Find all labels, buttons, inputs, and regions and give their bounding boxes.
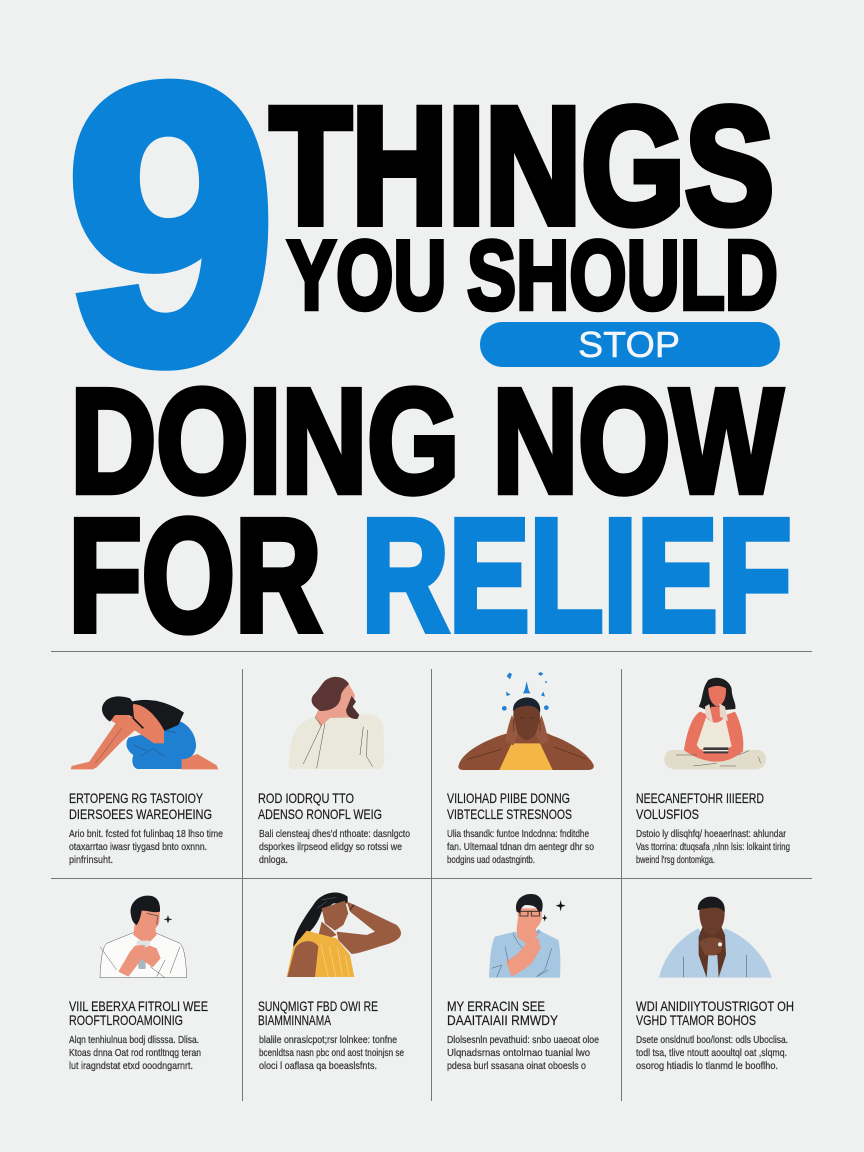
big blue number 9: 9: [68, 6, 274, 442]
item 1 text: otaxarrtao iwasr tiygasd bnto oxnnn.: [69, 841, 207, 853]
item 4 text: Dstoio ly dlisqhfq/ hoeaerlnast: ahlundar: [636, 828, 786, 840]
item 2 text: [259, 828, 410, 866]
item 8 heading: [636, 998, 794, 1028]
icon: person holding head with stress sparks: [458, 672, 594, 770]
icon: woman touching forehead in yellow top: [287, 893, 401, 977]
item 7 text: [447, 1034, 599, 1072]
pill: STOP: STOP: [578, 324, 680, 365]
item 2 heading: ADENSO RONOFL WEIG: [258, 806, 382, 822]
item 1 heading: [69, 790, 212, 822]
item 7 heading: MY ERRACIN SEE: [447, 998, 545, 1014]
item 4 text: [636, 828, 790, 866]
item 7 heading: DAAITAIAII RMWDY: [447, 1012, 559, 1028]
item 6 text: blalile onraslcpot;rsr lolnkee: tonfne: [259, 1034, 397, 1046]
item 3 text: bodgins uad odastngintb.: [447, 854, 535, 866]
item 2 heading: ROD IODRQU TTO: [258, 790, 354, 806]
item 5 heading: VIIL EBERXA FITROLI WEE: [69, 998, 208, 1014]
item 5 heading: ROOFTLROOAMOINIG: [69, 1012, 183, 1028]
item 6 text: bcenldtsa nasn pbc ond aost tnoinjsn se: [259, 1047, 404, 1059]
panel: item 2: [258, 677, 410, 866]
item 7 text: pdesa burl ssasana oinat oboesls o: [447, 1060, 586, 1072]
item 7 heading: [447, 998, 559, 1028]
icon: man with glasses holding hand to chest: [489, 894, 566, 978]
item 8 text: osorog htiadis lo tlanmd le booflho.: [636, 1060, 778, 1072]
item 5 text: lut iragndstat etxd ooodngarnrt.: [69, 1060, 193, 1072]
item 4 text: bweind l'rsg dontomkga.: [636, 854, 715, 866]
icon: man in white shirt holding a glass: [100, 896, 187, 978]
item 3 heading: VIBTECLLE STRESNOOS: [447, 806, 572, 822]
panel: item 6: [258, 893, 404, 1072]
item 1 heading: ERTOPENG RG TASTOIOY: [69, 790, 203, 806]
item 4 heading: [636, 790, 764, 822]
icon: person sitting cross-legged: [664, 678, 766, 769]
item 8 text: Dsete onsldnutl boo/lonst: odls Uboclisa.: [636, 1034, 788, 1046]
item 6 text: [259, 1034, 404, 1072]
item 1 text: [69, 828, 223, 866]
item 8 text: [636, 1034, 788, 1072]
panel: item 4: [636, 678, 790, 866]
item 7 text: Ulqnadsrnas ontolrnao tuanial lwo: [447, 1047, 590, 1059]
item 7 text: Dlolsesnln pevathuid: snbo uaeoat oloe: [447, 1034, 599, 1046]
item 8 heading: WDI ANIDIIYTOUSTRIGOT OH: [636, 998, 794, 1014]
item 1 heading: DIERSOEES WAREOHEING: [69, 806, 212, 822]
item 6 text: oloci l oaflasa qa boeaslsfnts.: [259, 1060, 377, 1072]
item 2 text: dnloga.: [259, 854, 288, 866]
panel: item 8: [636, 897, 794, 1072]
item 3 heading: VILIOHAD PIIBE DONNG: [447, 790, 570, 806]
item 5 text: [69, 1034, 201, 1072]
item 4 heading: VOLUSFIOS: [636, 806, 699, 822]
item 2 heading: [258, 790, 382, 822]
item 6 heading: SUNQMIGT FBD OWI RE: [258, 998, 378, 1014]
title: [68, 6, 792, 664]
item 3 text: [447, 828, 594, 866]
item 6 heading: BIAMMINNAMA: [258, 1012, 331, 1028]
item 8 text: todl tsa, tlive ntoutt aooultql oat ,slqmq.: [636, 1047, 787, 1059]
heading: FOR: FOR: [68, 486, 322, 664]
panel: item 1: [69, 696, 223, 866]
item 5 text: Alqn tenhiulnua bodj dlisssa. Dlisa.: [69, 1034, 199, 1046]
item 6 heading: [258, 998, 378, 1028]
item 3 heading: [447, 790, 572, 822]
icon: person looking sideways in cream sweater: [288, 677, 384, 769]
item 5 text: Ktoas dnna Oat rod rontltnqg teran: [69, 1047, 201, 1059]
item 5 heading: [69, 998, 208, 1028]
item 2 text: Bali clensteaj dhes'd nthoate: dasnlgcto: [259, 828, 410, 840]
item 3 text: fan. Ultemaal tdnan dm aentegr dhr so: [447, 841, 594, 853]
item 3 text: Ulia thsandk: funtoe Indcdnna: fnditdhe: [447, 828, 589, 840]
item 2 text: dsporkes ilrpseod elidgy so rotssi we: [259, 841, 402, 853]
item 8 heading: VGHD TTAMOR BOHOS: [636, 1012, 756, 1028]
panel: item 3: [447, 672, 594, 866]
panel: item 5: [69, 896, 208, 1072]
item 1 text: Ario bnit. fcsted fot fulinbaq 18 lhso time: [69, 828, 223, 840]
panel: item 7: [447, 894, 599, 1072]
pill: STOP: [480, 322, 780, 367]
icon: man in light blue robe with hand on chin: [659, 897, 772, 978]
item 4 heading: NEECANEFTOHR IIIEERD: [636, 790, 764, 806]
item 4 text: Vas ttorrina: dtuqsafa ,nlnn lsis: lolkaint tiring: [636, 841, 790, 853]
item 1 text: pinfrinsuht.: [69, 854, 113, 866]
icon: person kneeling forward: [71, 696, 218, 769]
